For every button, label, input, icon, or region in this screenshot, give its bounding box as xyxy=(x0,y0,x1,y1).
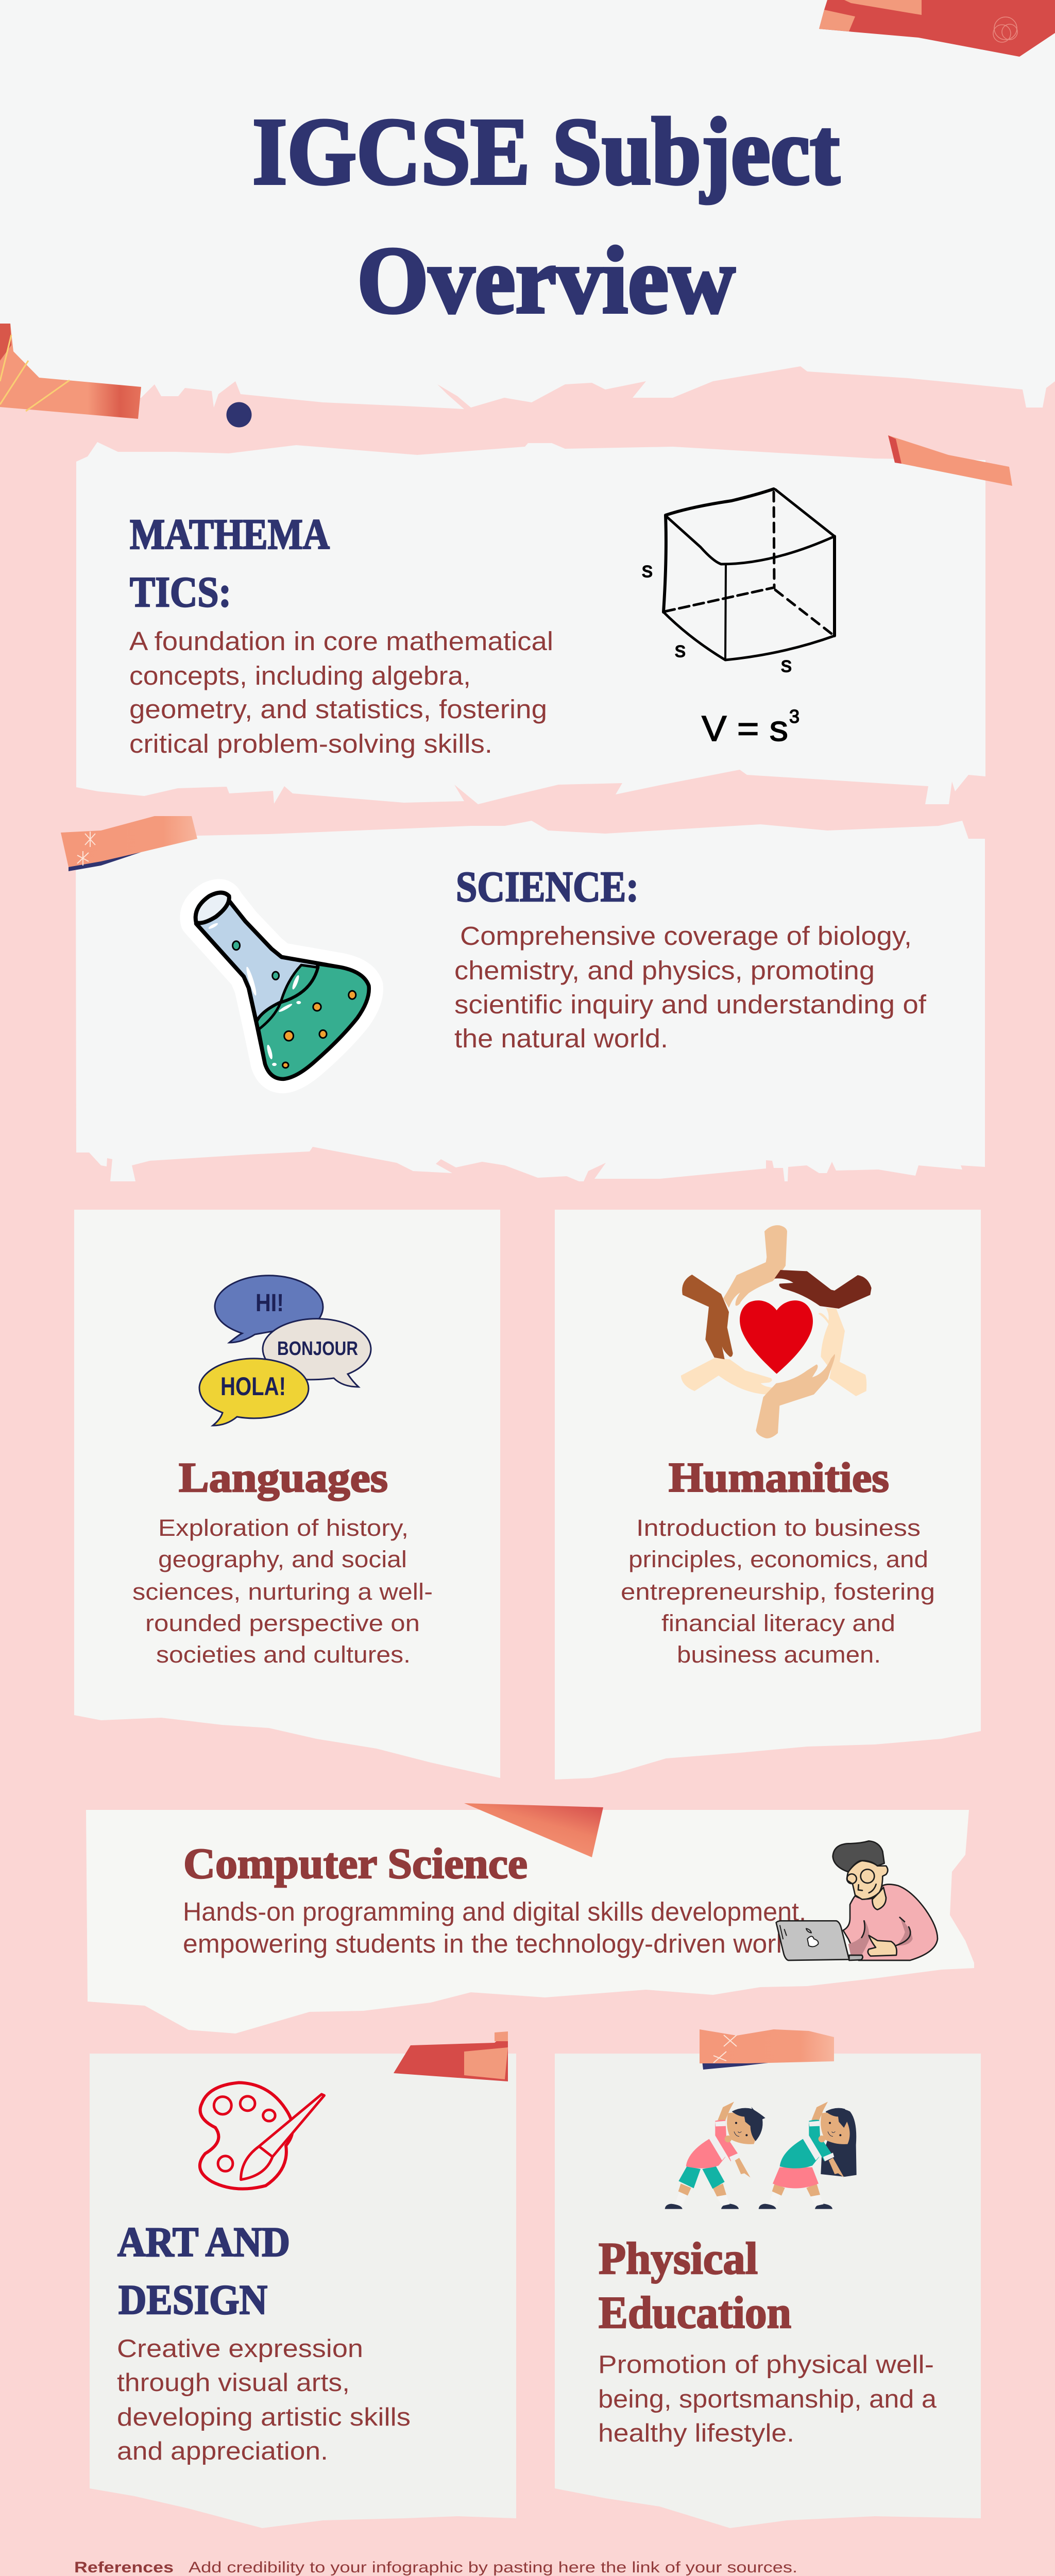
icon: speech bubbles xyxy=(199,1276,371,1426)
girl xyxy=(759,2102,857,2209)
text: humanities xyxy=(621,1515,935,1668)
text: languages: Exploration of history, xyxy=(158,1515,409,1541)
tape: left xyxy=(0,324,141,419)
text: languages: sciences, nurturing a well- xyxy=(132,1579,433,1605)
icon: palette xyxy=(200,2082,324,2189)
text: science xyxy=(454,921,927,1053)
heading: computer science: Computer Science xyxy=(183,1840,528,1888)
icon: hands and heart xyxy=(681,1225,872,1438)
text: mathematics: A foundation in core mathematical xyxy=(129,626,553,656)
text: art and design: Creative expression xyxy=(117,2335,363,2363)
panel: art and design xyxy=(90,2031,516,2528)
text: humanities: entrepreneurship, fostering xyxy=(621,1579,935,1605)
header panel xyxy=(0,0,1055,428)
title: IGCSE Subject xyxy=(252,99,840,205)
heading: art and design: ART AND xyxy=(117,2218,290,2265)
dot xyxy=(227,402,251,428)
heading: mathematics: MATHEMA xyxy=(130,511,330,558)
heading: physical education: Physical xyxy=(599,2234,758,2284)
text: art and design xyxy=(117,2335,411,2465)
text: computer science: empowering students in the technology-driven world. xyxy=(183,1929,804,1958)
heading: mathematics: TICS: xyxy=(130,568,231,616)
text: science: chemistry, and physics, promoting xyxy=(454,956,875,985)
text: languages: societies and cultures. xyxy=(156,1641,411,1668)
heading: art and design xyxy=(117,2218,290,2323)
cube labels: 3 xyxy=(789,706,799,727)
text: physical education xyxy=(598,2351,937,2447)
panel: physical education xyxy=(555,2029,981,2528)
heading: physical education: Education xyxy=(599,2288,791,2338)
text: art and design: and appreciation. xyxy=(117,2437,328,2465)
cube labels: s xyxy=(642,557,653,582)
panel: science xyxy=(61,816,985,1181)
text: languages xyxy=(132,1515,433,1668)
heading: mathematics xyxy=(130,511,330,616)
text: mathematics: critical problem-solving skills. xyxy=(129,729,492,758)
text: computer science: Hands-on programming and digital skills development, xyxy=(183,1897,806,1926)
tape: physical education xyxy=(700,2029,834,2070)
cube labels: s xyxy=(675,637,686,662)
text: art and design: through visual arts, xyxy=(117,2369,350,2397)
icon: cube xyxy=(663,489,835,660)
text: mathematics: concepts, including algebra, xyxy=(129,661,471,690)
tape: science xyxy=(61,816,197,871)
text: humanities: business acumen. xyxy=(677,1641,881,1668)
icon: speech bubbles: HOLA! xyxy=(220,1372,286,1401)
text: science: the natural world. xyxy=(454,1024,668,1053)
heading: physical education xyxy=(599,2234,791,2338)
cube labels: V = s xyxy=(702,708,788,749)
heading: art and design: DESIGN xyxy=(118,2276,267,2323)
text: humanities: Introduction to business xyxy=(636,1515,921,1541)
panel: humanities xyxy=(555,1210,981,1780)
cube labels xyxy=(642,557,799,749)
text: art and design: developing artistic skills xyxy=(117,2403,411,2431)
tape: computer science xyxy=(464,1803,603,1857)
text: languages: geography, and social xyxy=(158,1546,407,1572)
icon: speech bubbles: HI! xyxy=(256,1290,284,1317)
references: Add credibility to your infographic by pasting here the link of your sources. xyxy=(189,2559,797,2576)
icon: children stretching xyxy=(665,2102,857,2209)
icon: person with laptop xyxy=(776,1841,938,1960)
references xyxy=(74,2559,797,2576)
text: computer science xyxy=(183,1897,806,1958)
text: science: Comprehensive coverage of biology, xyxy=(460,921,912,951)
text: humanities: principles, economics, and xyxy=(628,1546,928,1572)
text: science: scientific inquiry and understanding of xyxy=(454,990,927,1019)
panel: computer science xyxy=(86,1803,974,2033)
tape: mathematics xyxy=(888,435,1012,486)
title xyxy=(252,99,840,333)
tape: top right xyxy=(819,0,1055,57)
heading: humanities: Humanities xyxy=(669,1454,889,1501)
text: mathematics xyxy=(129,626,553,758)
title: Overview xyxy=(357,228,735,333)
text: languages: rounded perspective on xyxy=(145,1610,420,1636)
panel: mathematics xyxy=(76,435,1012,804)
text: physical education: Promotion of physical well- xyxy=(598,2351,934,2379)
boy xyxy=(665,2102,765,2209)
icon: flask xyxy=(194,893,369,1079)
text: physical education: being, sportsmanship, and a xyxy=(598,2385,937,2413)
heading: languages: Languages xyxy=(179,1454,388,1501)
panel: languages xyxy=(74,1210,500,1778)
heading: science: SCIENCE: xyxy=(456,863,639,911)
text: humanities: financial literacy and xyxy=(661,1610,895,1636)
references: References xyxy=(74,2559,174,2576)
text: physical education: healthy lifestyle. xyxy=(598,2419,794,2447)
text: mathematics: geometry, and statistics, fostering xyxy=(129,694,547,724)
cube labels: s xyxy=(781,652,792,676)
icon: speech bubbles: BONJOUR xyxy=(277,1338,358,1360)
tape: art and design xyxy=(394,2031,508,2081)
